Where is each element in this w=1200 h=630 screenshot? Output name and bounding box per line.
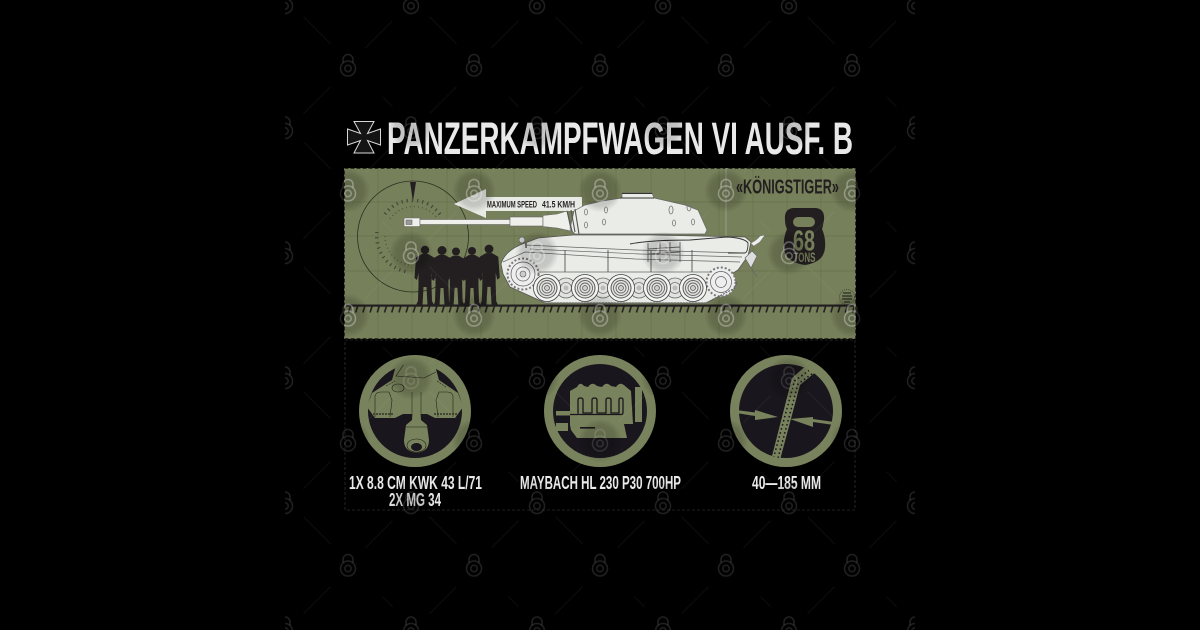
arrow: maximum speed: 41.5 KM/H [542, 200, 575, 210]
panel: specifications [345, 340, 855, 510]
icon: kettlebell weight 68 tons: 68 [793, 226, 815, 258]
icon: small emblem [840, 290, 854, 304]
label: engine: MAYBACH HL 230 P30 700HP [520, 473, 681, 493]
crew silhouettes [414, 245, 500, 306]
ground line [346, 304, 854, 313]
label: armament: 2X MG 34 [389, 490, 441, 510]
turret [567, 193, 707, 234]
label: armament [349, 473, 482, 510]
antenna [725, 168, 727, 236]
icon: armament [364, 358, 466, 462]
heading text: PANZERKAMPFWAGEN VI AUSF. B [387, 113, 853, 164]
arrow: maximum speed: MAXIMUM SPEED [487, 200, 537, 210]
icon: kettlebell weight 68 tons [784, 208, 825, 265]
subtitle: Königstiger: «KÖNIGSTIGER» [736, 176, 839, 198]
tracks and wheels [508, 258, 736, 303]
icon: iron cross [348, 122, 380, 153]
label: armor: 40—185 MM [752, 473, 821, 493]
arrow: maximum speed [454, 189, 582, 218]
icon: kettlebell weight 68 tons: TONS [794, 249, 816, 265]
icon: engine [548, 360, 652, 462]
range dial [358, 181, 468, 292]
title [348, 113, 853, 164]
tank illustration [404, 168, 765, 303]
label: armament: 1X 8.8 CM KWK 43 L/71 [349, 473, 482, 493]
panel: tank profile [344, 168, 856, 339]
icon: armor thickness [734, 360, 838, 462]
hull [501, 235, 765, 303]
gun barrel [404, 211, 571, 231]
